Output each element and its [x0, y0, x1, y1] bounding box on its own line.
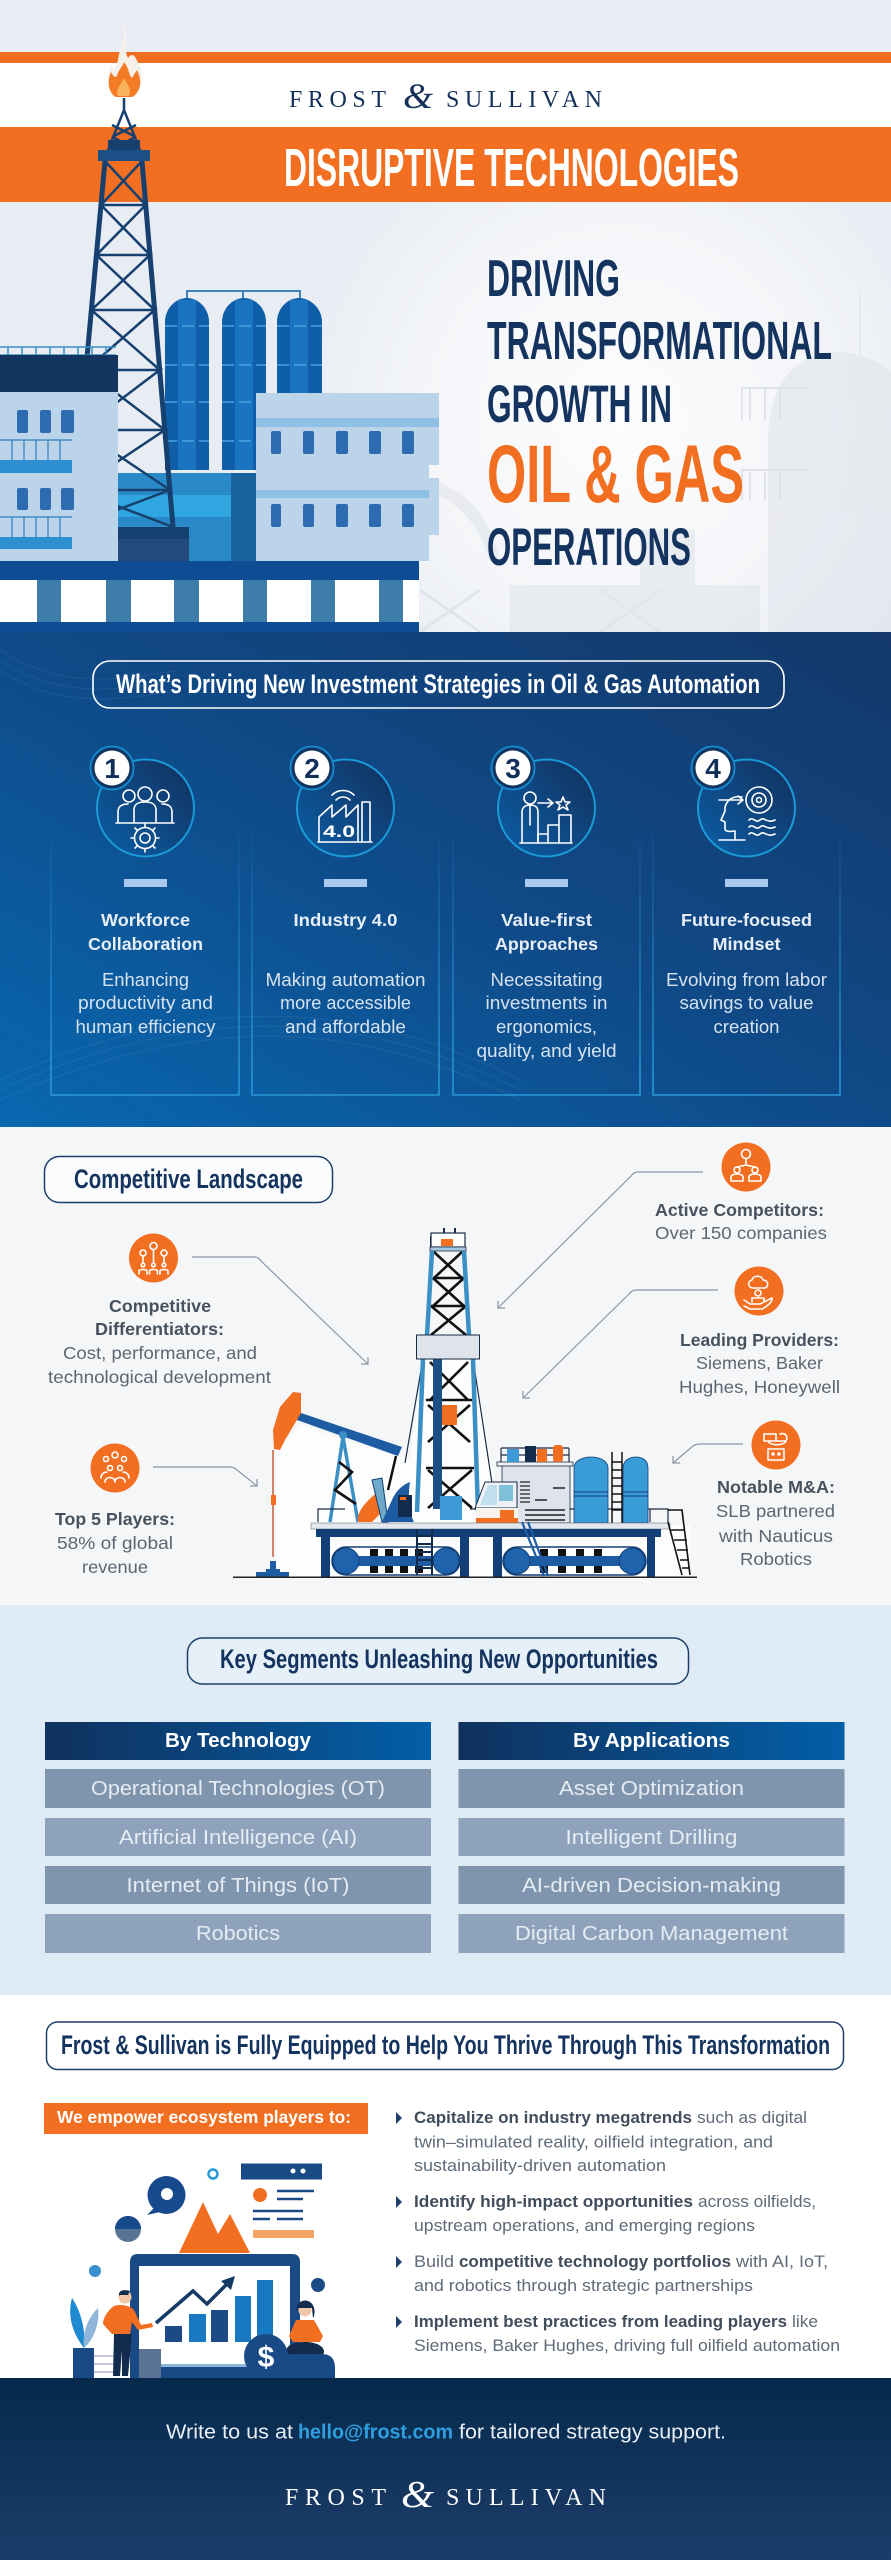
logo: Frost & Sullivan: &	[403, 76, 433, 116]
icon: team and gear	[116, 787, 174, 852]
panel: investment drivers	[0, 632, 891, 1127]
card 3: value-first approaches: Necessitating	[490, 970, 602, 990]
callout: competitive differentiators	[48, 1234, 271, 1387]
bullet 1: such as digital	[697, 2109, 807, 2127]
panel: how Frost & Sullivan helps	[0, 1995, 891, 2378]
panel: footer	[0, 2378, 891, 2560]
contact line: hello@frost.com	[298, 2422, 453, 2444]
logo: Frost & Sullivan: FROST	[289, 87, 386, 113]
derrick tower	[72, 98, 173, 527]
storage tanks	[574, 1452, 648, 1523]
callout: competitive differentiators: Competitive	[109, 1296, 211, 1316]
column: by applications: Intelligent Drilling	[566, 1827, 738, 1849]
heading pill: Competitive Landscape	[74, 1164, 303, 1194]
callout: notable M&A: SLB partnered	[716, 1501, 835, 1521]
mid structure	[118, 473, 256, 561]
column: by technology: By Technology	[165, 1730, 312, 1752]
card 2: industry 4.0: Industry 4.0	[294, 910, 398, 930]
badge 3: 3	[505, 753, 521, 784]
cab	[475, 1482, 565, 1523]
heading pill	[93, 661, 784, 708]
callout: top 5 players: Top 5 Players:	[55, 1509, 175, 1529]
railing	[318, 1509, 668, 1522]
headline: OPERATIONS	[487, 518, 691, 577]
logo: Frost & Sullivan: SULLIVAN	[446, 87, 602, 113]
card 4: future-focused mindset: creation	[714, 1017, 780, 1037]
badge 4	[692, 746, 734, 790]
pumpjack	[256, 1392, 414, 1577]
bullet 4: Siemens, Baker Hughes, driving full oilfield automation	[414, 2337, 840, 2355]
bullet 2	[396, 2193, 816, 2235]
heading pill: Key Segments Unleashing New Opportunities	[220, 1644, 658, 1674]
bullet 2: across oilfields,	[698, 2193, 816, 2211]
callout: notable M&A: Robotics	[740, 1549, 812, 1569]
headline: DRIVING	[487, 250, 620, 308]
column: by applications: AI-driven Decision-making	[522, 1875, 781, 1897]
flame	[108, 22, 142, 97]
column: by applications: Asset Optimization	[559, 1778, 744, 1800]
bullet 4: like	[792, 2313, 818, 2331]
info panel	[241, 2164, 322, 2238]
bullet 3: with AI, IoT,	[735, 2253, 828, 2271]
panel: hero header	[0, 0, 891, 632]
callout: top 5 players: revenue	[82, 1557, 148, 1577]
right building	[256, 393, 439, 561]
card 2: industry 4.0: Making automation	[266, 970, 426, 990]
connector: active competitors	[498, 1172, 703, 1308]
illustration: growth dashboard	[70, 2164, 335, 2378]
heading pill	[188, 1638, 688, 1684]
column: by technology	[45, 1722, 431, 1953]
derrick base	[118, 527, 189, 539]
bullet 4	[396, 2313, 840, 2355]
logo: Frost & Sullivan white: SULLIVAN	[446, 2485, 606, 2511]
card 1: workforce collaboration	[51, 746, 239, 1095]
platform deck	[0, 561, 419, 632]
badge 4: 4	[705, 753, 721, 784]
deck	[311, 1523, 670, 1529]
connector: top 5 players	[153, 1467, 257, 1486]
callout: leading providers: Leading Providers:	[680, 1330, 839, 1350]
guy wires	[405, 1359, 492, 1483]
badge 2	[290, 746, 334, 790]
power unit	[497, 1445, 573, 1523]
white logo band	[0, 63, 891, 127]
bullet 3: and robotics through strategic partnerships	[414, 2277, 753, 2295]
card 1: workforce collaboration: human efficiency	[76, 1017, 216, 1037]
card 4: future-focused mindset: savings to value	[680, 993, 814, 1013]
card 1: workforce collaboration: Collaboration	[88, 934, 203, 954]
column: by technology: Internet of Things (IoT)	[126, 1875, 350, 1897]
coin	[244, 2334, 288, 2378]
callout: active competitors	[655, 1142, 827, 1243]
callout: we empower: We empower ecosystem players to:	[57, 2107, 351, 2127]
badge 1: 1	[104, 753, 120, 784]
logo: Frost & Sullivan white: FROST	[285, 2485, 386, 2511]
card 4: future-focused mindset: Evolving from labor	[666, 970, 827, 990]
monitor	[130, 2254, 300, 2378]
card 4: future-focused mindset	[653, 746, 840, 1095]
floating shapes	[89, 2170, 325, 2292]
column: by technology: Robotics	[196, 1923, 280, 1945]
column: by applications: By Applications	[573, 1730, 730, 1752]
callout: top 5 players: 58% of global	[57, 1533, 173, 1553]
bullet 1	[396, 2109, 807, 2175]
person: seated	[286, 2300, 324, 2358]
callout: top 5 players	[55, 1444, 175, 1577]
ground line	[233, 1576, 697, 1578]
panel: competitive landscape	[0, 1127, 891, 1605]
callout: leading providers: Hughes, Honeywell	[679, 1377, 840, 1397]
headline	[487, 250, 832, 577]
bullet 3: Build	[414, 2253, 454, 2271]
bullet list	[396, 2109, 840, 2355]
bullet 2: Identify high-impact opportunities	[414, 2193, 693, 2211]
headline: GROWTH IN	[487, 375, 672, 434]
illustration: refinery and derrick	[0, 22, 439, 632]
callout: competitive differentiators: Cost, performance, and	[63, 1343, 257, 1363]
connector: differentiators	[192, 1257, 368, 1364]
badge 2: 2	[304, 753, 320, 784]
coin: $	[258, 2341, 275, 2374]
bullet 1: Capitalize on industry megatrends	[414, 2109, 692, 2127]
bullet 1: twin–simulated reality, oilfield integration, and	[414, 2134, 773, 2152]
faint plant background	[420, 290, 891, 632]
connector: notable M&A	[673, 1444, 743, 1463]
ladders	[417, 1529, 432, 1575]
callout: competitive differentiators: technological development	[48, 1367, 271, 1387]
card 1: workforce collaboration: productivity and	[78, 993, 213, 1013]
card 2: industry 4.0: 4.0	[323, 822, 355, 841]
column: by technology: Operational Technologies (OT)	[91, 1778, 385, 1800]
deck legs	[321, 1537, 655, 1577]
illustration: oil rig and pumpjack	[233, 1228, 697, 1578]
callout: we empower	[44, 2103, 368, 2134]
mountains	[179, 2202, 250, 2253]
person: presenter	[103, 2290, 153, 2376]
heading pill	[44, 1156, 332, 1202]
column: by applications	[458, 1722, 844, 1953]
contact line	[166, 2422, 726, 2444]
plant	[70, 2298, 114, 2378]
card 3: value-first approaches	[453, 746, 640, 1095]
card 3: value-first approaches: ergonomics,	[496, 1017, 597, 1037]
card 1: workforce collaboration: Enhancing	[102, 970, 189, 990]
card 4: future-focused mindset: Future-focused	[681, 910, 812, 930]
left building	[0, 347, 118, 562]
callout: notable M&A	[716, 1420, 835, 1569]
card 2: industry 4.0: more accessible	[280, 993, 411, 1013]
callout: active competitors: Over 150 companies	[655, 1223, 827, 1243]
seat	[284, 2354, 335, 2378]
bullet 4: Implement best practices from leading players	[414, 2313, 787, 2331]
callout: notable M&A: with Nauticus	[718, 1526, 833, 1546]
card 3: value-first approaches: investments in	[486, 993, 608, 1013]
callout: notable M&A: Notable M&A:	[717, 1477, 835, 1497]
wave pattern	[0, 650, 520, 1100]
card 1: workforce collaboration: Workforce	[101, 910, 190, 930]
bullet 2: upstream operations, and emerging regions	[414, 2217, 755, 2235]
card 2: industry 4.0	[252, 746, 439, 1095]
card 3: value-first approaches: Approaches	[495, 934, 598, 954]
storage tanks	[165, 291, 322, 470]
bullet 1: sustainability-driven automation	[414, 2157, 666, 2175]
orange title band	[0, 127, 891, 202]
callout: active competitors: Active Competitors:	[655, 1200, 824, 1220]
orange top stripe	[0, 52, 891, 63]
icon: factory	[318, 790, 372, 842]
heading pill	[46, 2022, 844, 2070]
card 2: industry 4.0: and affordable	[285, 1017, 406, 1037]
callout: leading providers: Siemens, Baker	[696, 1353, 823, 1373]
callout: competitive differentiators: Differentiators:	[95, 1319, 224, 1339]
connector: leading providers	[523, 1290, 718, 1398]
logo: Frost & Sullivan white: &	[401, 2474, 434, 2516]
icon: person and growth	[520, 792, 572, 843]
crawler tracks	[332, 1547, 646, 1575]
logo: Frost & Sullivan	[289, 76, 602, 116]
callout: leading providers	[679, 1266, 840, 1397]
card 3: value-first approaches: quality, and yield	[476, 1041, 616, 1061]
bullet 3: competitive technology portfolios	[459, 2253, 731, 2271]
card 3: value-first approaches: Value-first	[501, 910, 592, 930]
badge 1	[90, 746, 134, 790]
card 4: future-focused mindset: Mindset	[712, 934, 781, 954]
column: by technology: Artificial Intelligence (AI)	[119, 1827, 357, 1849]
icon: head and target	[719, 787, 775, 840]
badge 3	[492, 746, 534, 790]
bullet 3	[396, 2253, 828, 2295]
contact line: for tailored strategy support.	[459, 2422, 726, 2444]
contact line: Write to us at	[166, 2422, 293, 2444]
logo: Frost & Sullivan white	[285, 2474, 606, 2516]
column: by applications: Digital Carbon Management	[515, 1923, 788, 1945]
rig tower	[416, 1228, 480, 1520]
panel: key segments	[0, 1605, 891, 1995]
